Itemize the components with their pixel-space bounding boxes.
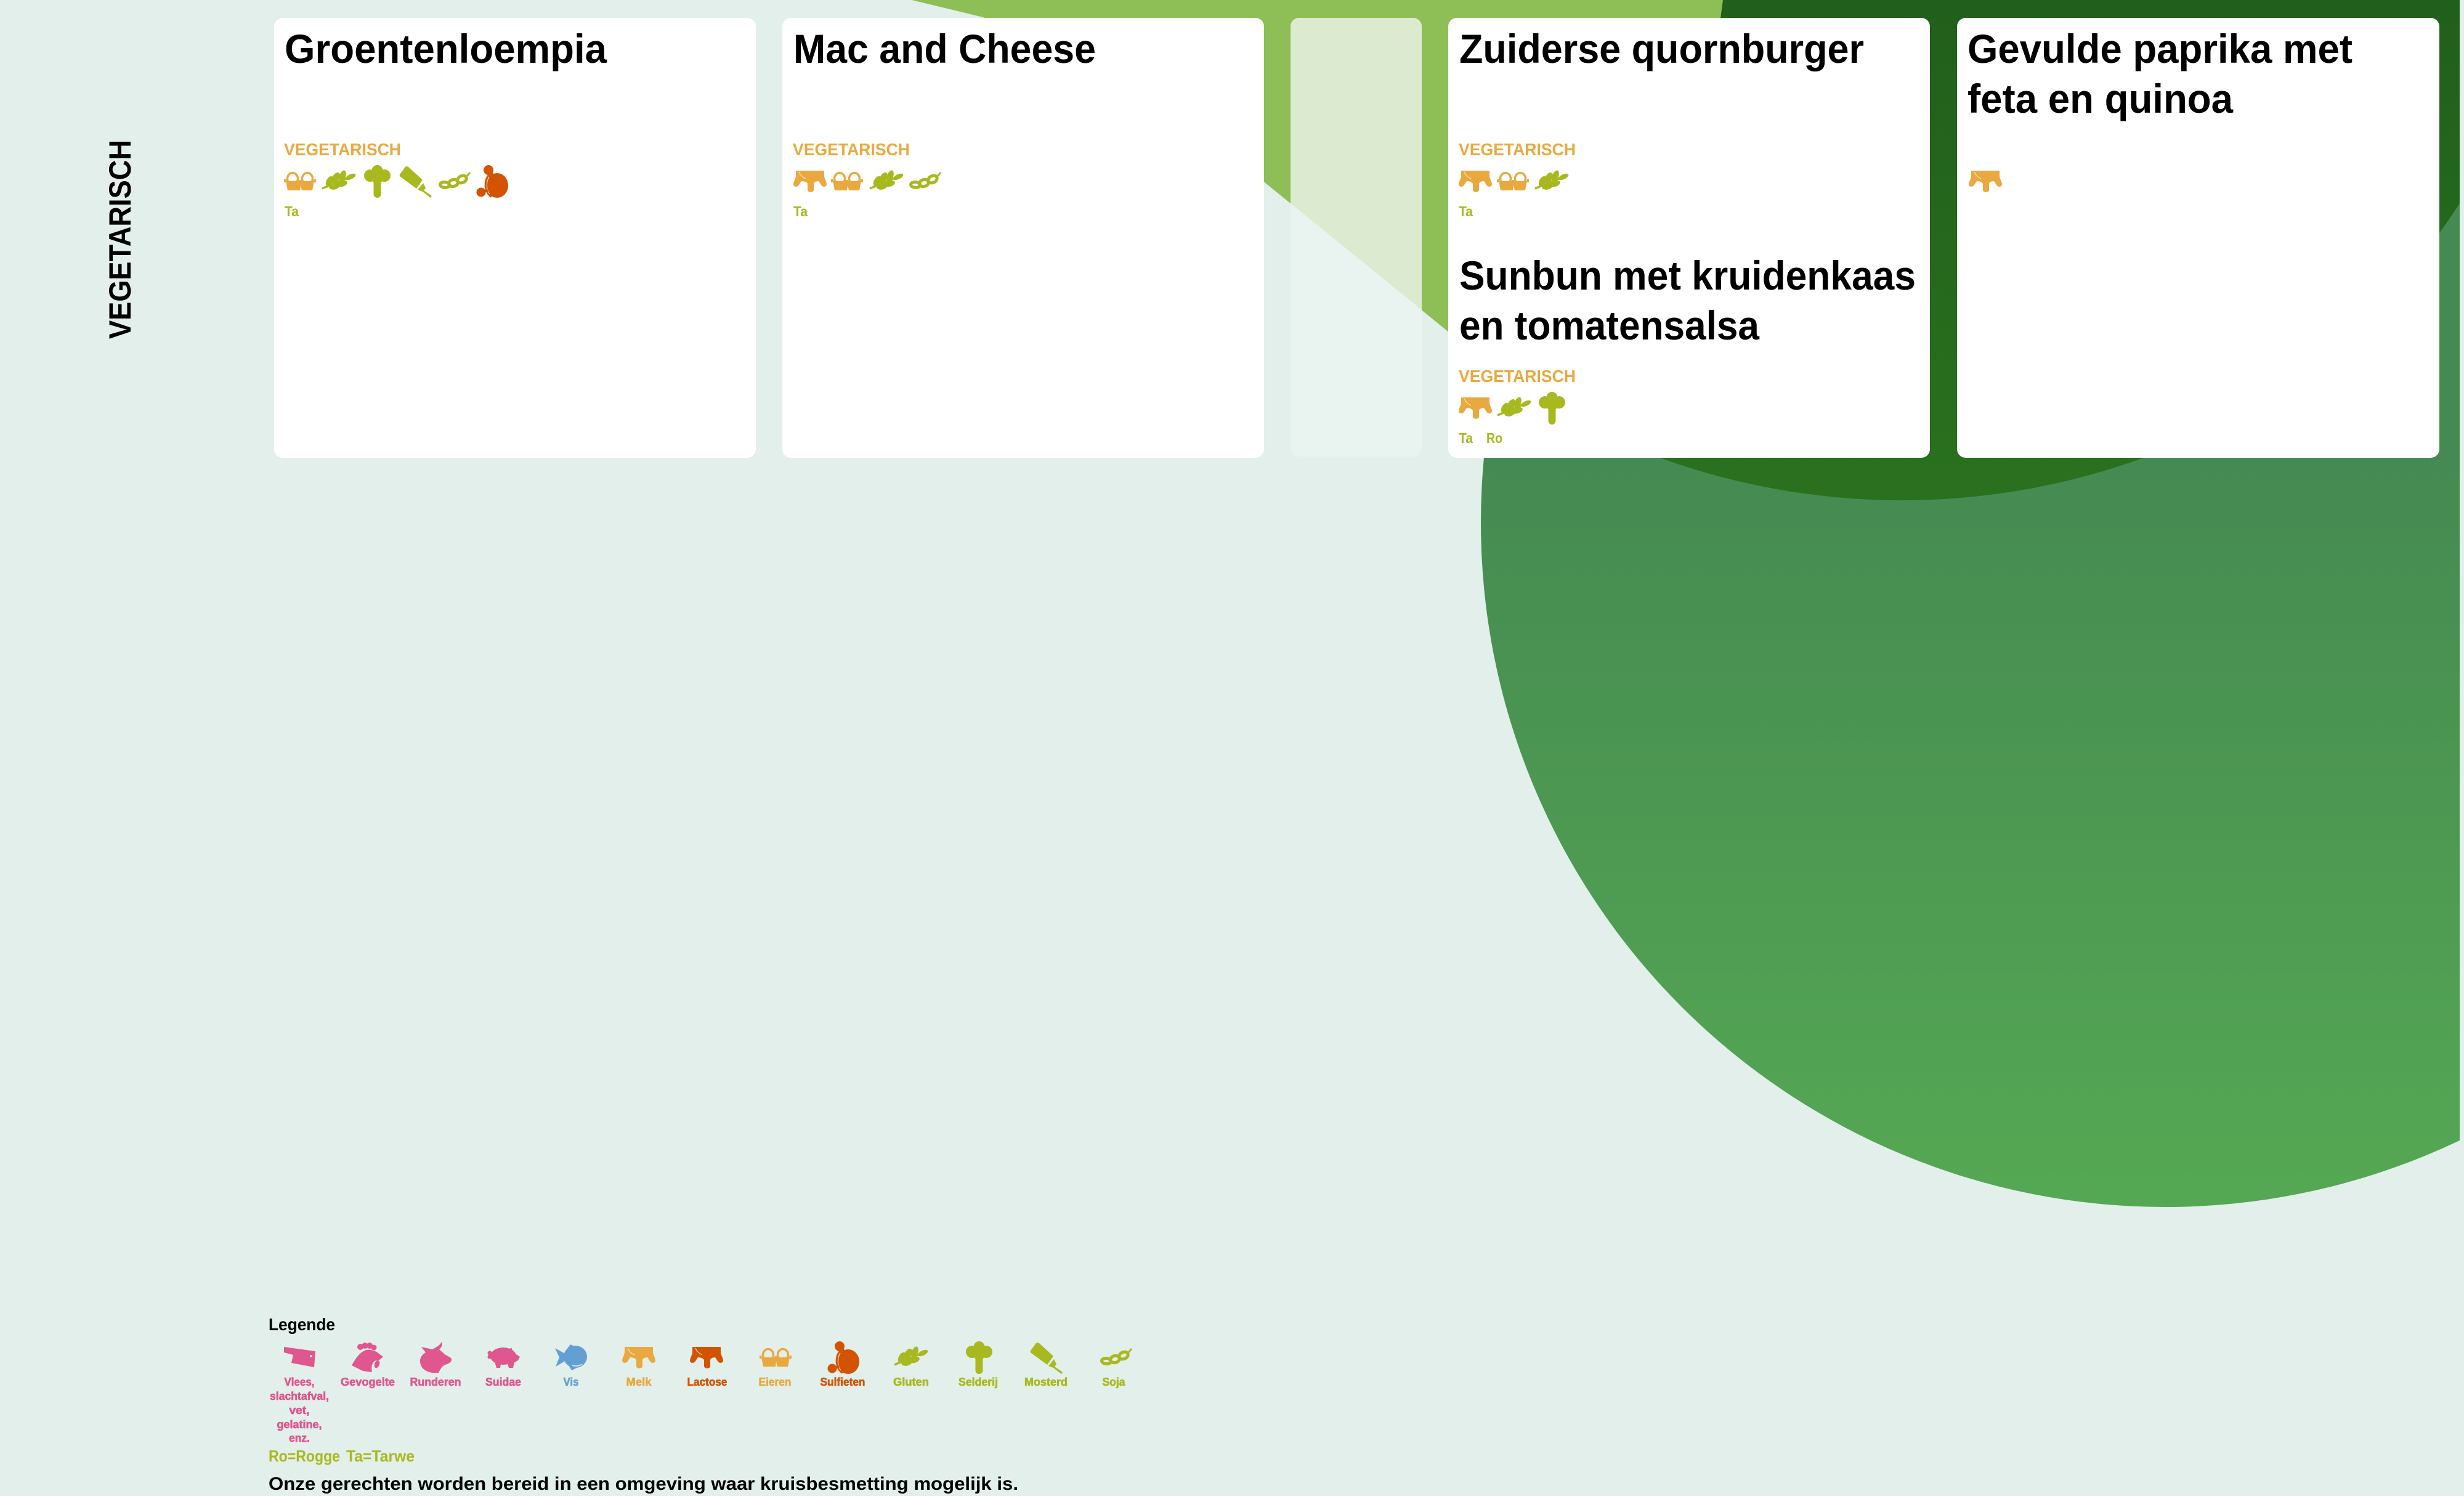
dish title <box>1459 253 1916 348</box>
card: Gevulde paprika <box>1957 18 2439 458</box>
legend item: Lactose: Lactose <box>687 1376 727 1388</box>
decorative green shapes <box>912 0 2464 1207</box>
legend item: Selderij <box>958 1341 998 1388</box>
grain abbreviations: Ta=Tarwe <box>346 1447 415 1465</box>
legend item: Mosterd: Mosterd <box>1024 1376 1068 1388</box>
allergen icons <box>793 169 941 192</box>
legend item: Vlees: gelatine, <box>277 1418 322 1431</box>
dish title: Mac and Cheese <box>793 26 1096 71</box>
card: Groentenloempia <box>274 18 756 458</box>
legend item: Vlees: vet, <box>290 1404 309 1417</box>
dark green shape <box>1602 0 2460 500</box>
allergen icons <box>1459 392 1565 425</box>
legend item: Lactose <box>687 1347 727 1388</box>
gluten sources: Ro <box>1486 430 1502 446</box>
card: Mac and Cheese <box>782 18 1264 458</box>
legend item: Vlees <box>270 1347 329 1444</box>
legend item: Vlees: slachtafval, <box>270 1390 329 1402</box>
gluten source: Ta <box>1459 203 1473 219</box>
empty translucent card <box>1291 18 1422 311</box>
diet label: VEGETARISCH <box>284 140 401 159</box>
dish title: Sunbun met kruidenkaas <box>1459 253 1916 298</box>
legend item: Gluten: Gluten <box>893 1376 929 1388</box>
legend item: Eieren: Eieren <box>759 1376 791 1388</box>
dish title: feta en quinoa <box>1968 76 2234 121</box>
dish title: Groentenloempia <box>285 26 607 71</box>
diet label: VEGETARISCH <box>1459 140 1576 159</box>
gluten source: Ta <box>793 203 808 219</box>
legend item: Melk: Melk <box>626 1376 652 1388</box>
gluten sources: Ta <box>1459 430 1473 446</box>
legend item: Gevogelte <box>341 1343 395 1388</box>
legend item: Suidae <box>485 1348 521 1388</box>
cross-contamination note: Onze gerechten worden bereid in een omgeving waar kruisbesmetting mogelijk is. <box>269 1474 1018 1494</box>
legend item: Runderen <box>410 1342 461 1388</box>
grain abbreviations <box>269 1447 415 1465</box>
icon: milk <box>1969 171 2002 192</box>
dish title: en tomatensalsa <box>1459 303 1760 348</box>
legend item: Eieren <box>759 1349 792 1388</box>
legend item: Vlees: Vlees, <box>285 1376 314 1388</box>
allergen icons <box>1459 169 1570 192</box>
legend <box>269 1315 1132 1494</box>
gluten source: Ta <box>285 203 299 219</box>
allergen icons <box>284 165 508 198</box>
legend item: Runderen: Runderen <box>410 1376 461 1388</box>
dish title <box>1968 26 2353 121</box>
legend heading: Legende <box>269 1315 335 1334</box>
legend item: Vis <box>555 1344 587 1388</box>
side heading: VEGETARISCH: VEGETARISCH <box>103 140 137 339</box>
legend item: Sulfieten <box>821 1341 865 1388</box>
legend item: Gluten <box>893 1346 929 1388</box>
card: Zuiderse quornburger and Sunbun <box>1448 18 1930 458</box>
legend item: Soja: Soja <box>1103 1376 1125 1388</box>
legend item: Mosterd <box>1024 1343 1068 1388</box>
legend item: Vlees: enz. <box>289 1432 310 1444</box>
legend item: Selderij: Selderij <box>958 1376 998 1388</box>
light green shape <box>912 0 1723 331</box>
diet label: VEGETARISCH <box>793 140 910 159</box>
legend item: Vis: Vis <box>563 1376 579 1388</box>
medium green circle <box>1481 203 2460 1207</box>
diet label: VEGETARISCH <box>1459 367 1576 386</box>
legend item: Gevogelte: Gevogelte <box>341 1376 395 1388</box>
dish title: Gevulde paprika met <box>1968 26 2353 71</box>
gluten sources <box>1459 430 1502 446</box>
legend item: Sulfieten: Sulfieten <box>821 1376 865 1388</box>
legend item: Soja <box>1101 1349 1132 1388</box>
legend item: Suidae: Suidae <box>485 1376 521 1388</box>
dish title: Zuiderse quornburger <box>1459 26 1864 71</box>
grain abbreviations: Ro=Rogge <box>269 1447 340 1465</box>
legend item: Melk <box>622 1347 655 1388</box>
